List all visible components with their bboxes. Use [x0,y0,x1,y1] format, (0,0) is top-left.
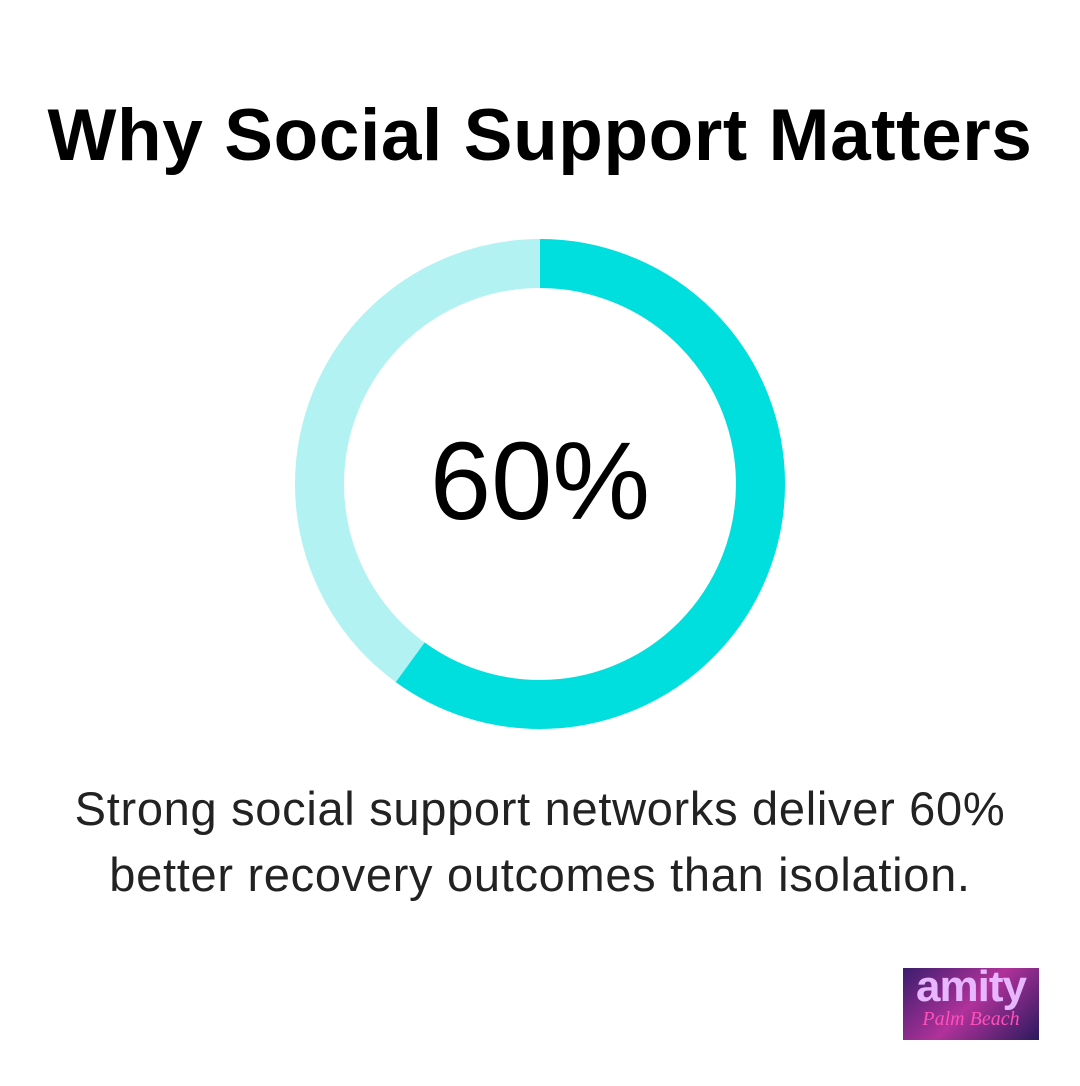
description: Strong social support networks deliver 60% [75,782,1005,835]
logo: Palm Beach [922,1008,1020,1030]
center value: 60% [430,420,650,543]
description: better recovery outcomes than isolation. [109,848,971,901]
description [75,782,1005,901]
title: Why Social Support Matters [48,95,1032,176]
logo: amity [916,962,1026,1011]
logo [903,968,1039,1040]
